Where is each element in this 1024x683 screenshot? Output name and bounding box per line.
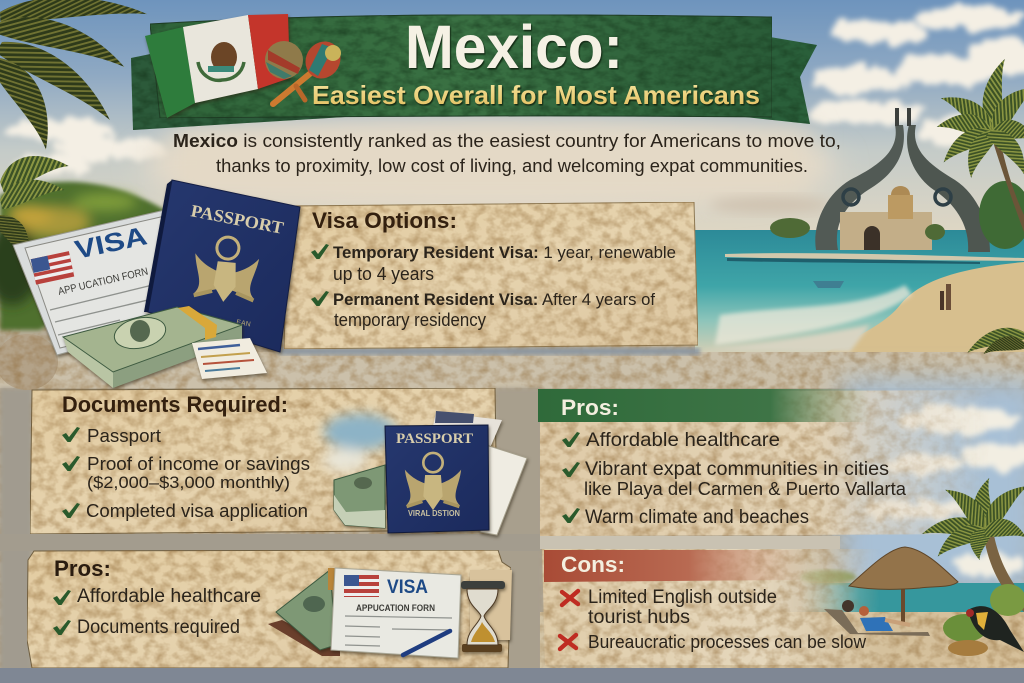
intro text — [173, 130, 841, 176]
panel: cons: tourist hubs — [588, 607, 690, 628]
panel: visa options: up to 4 years — [333, 264, 434, 284]
icon: palapa umbrella and lounger — [824, 547, 958, 636]
icon: passport and documents: VIRAL DSTION — [408, 508, 460, 518]
panel: pros left: Documents required — [77, 617, 240, 638]
panel: visa options: Temporary Resident Visa: 1 year, renewable — [333, 243, 676, 262]
heading: Cons: — [561, 552, 625, 577]
plant: beach right — [964, 323, 1024, 356]
watercolor wash — [323, 414, 396, 472]
icon: money, visa form and hourglass: APPUCATION FORN — [356, 603, 435, 614]
subtitle: Easiest Overall for Most Americans — [312, 80, 760, 110]
mid stone strip — [0, 352, 1024, 388]
panel: documents required: Passport — [87, 425, 161, 446]
intro text: Mexico is consistently ranked as the easiest country for Americans to move to, — [173, 130, 841, 151]
flag — [31, 251, 74, 285]
icon: Mexican flag — [145, 14, 290, 118]
icon: visa application form: APP UCATION FORN — [57, 266, 149, 298]
icon: money stack — [63, 306, 242, 388]
panel: pros right: Vibrant expat communities in cities — [585, 459, 889, 480]
icon: money, visa form and hourglass — [268, 568, 512, 658]
icon: passport and documents — [334, 411, 527, 535]
lower right sky, sea and sand — [840, 380, 1024, 595]
panel: visa options: temporary residency — [334, 310, 486, 330]
boat — [813, 281, 844, 288]
panel: documents required: Proof of income or savings — [87, 453, 310, 474]
icon: visa application form — [13, 210, 185, 355]
panel: pros right — [538, 389, 998, 536]
panel: pros right: Affordable healthcare — [586, 429, 780, 451]
icon: small card — [192, 338, 267, 379]
banner — [544, 550, 812, 582]
rock — [0, 334, 58, 390]
icon: large passport — [144, 180, 300, 352]
panel: documents required: ($2,000–$3,000 monthly) — [87, 474, 290, 492]
panel: pros left — [27, 550, 511, 668]
banner — [538, 389, 880, 422]
icon: maracas — [265, 35, 347, 104]
people on beach — [940, 284, 951, 310]
sky clouds — [5, 6, 1024, 173]
panel: visa options — [284, 202, 698, 349]
icon: bottom right palm — [922, 475, 1024, 612]
icon: passport and documents: PASSPORT — [396, 431, 473, 447]
panel: cons: Limited English outside — [588, 587, 777, 608]
hills — [0, 182, 165, 330]
intro text: thanks to proximity, low cost of living, and welcoming expat communities. — [216, 155, 808, 176]
heading: Documents Required: — [62, 392, 288, 417]
panel: cons: Bureaucratic processes can be slow — [588, 632, 867, 652]
sea and beach — [695, 230, 1024, 355]
title banner — [131, 13, 817, 130]
heading: Visa Options: — [312, 208, 457, 233]
heading: Pros: — [54, 556, 111, 581]
icon: money, visa form and hourglass: VISA — [387, 577, 428, 598]
panel: documents required: Completed visa application — [86, 500, 308, 521]
panel: pros right: Warm climate and beaches — [585, 507, 809, 528]
panel: visa options: Permanent Resident Visa: After 4 years of — [333, 290, 655, 309]
panel: pros left: Affordable healthcare — [77, 586, 261, 607]
palm: middle left — [0, 144, 70, 266]
heading: Pros: — [561, 395, 619, 420]
icon: toucan and foliage — [943, 584, 1024, 656]
monument and church — [770, 108, 1024, 252]
icon: visa application form: VISA — [72, 220, 150, 265]
palm: right — [936, 57, 1024, 232]
icon: large passport: EAN — [236, 319, 251, 328]
left and bottom stone — [0, 388, 32, 683]
icon: large passport: PASSPORT — [189, 200, 286, 238]
palm: top left — [0, 0, 147, 152]
title: Mexico: — [405, 13, 623, 81]
panel: documents required — [30, 388, 497, 534]
panel: pros right: like Playa del Carmen & Puerto Vallarta — [584, 478, 907, 499]
panel: cons — [542, 549, 900, 665]
